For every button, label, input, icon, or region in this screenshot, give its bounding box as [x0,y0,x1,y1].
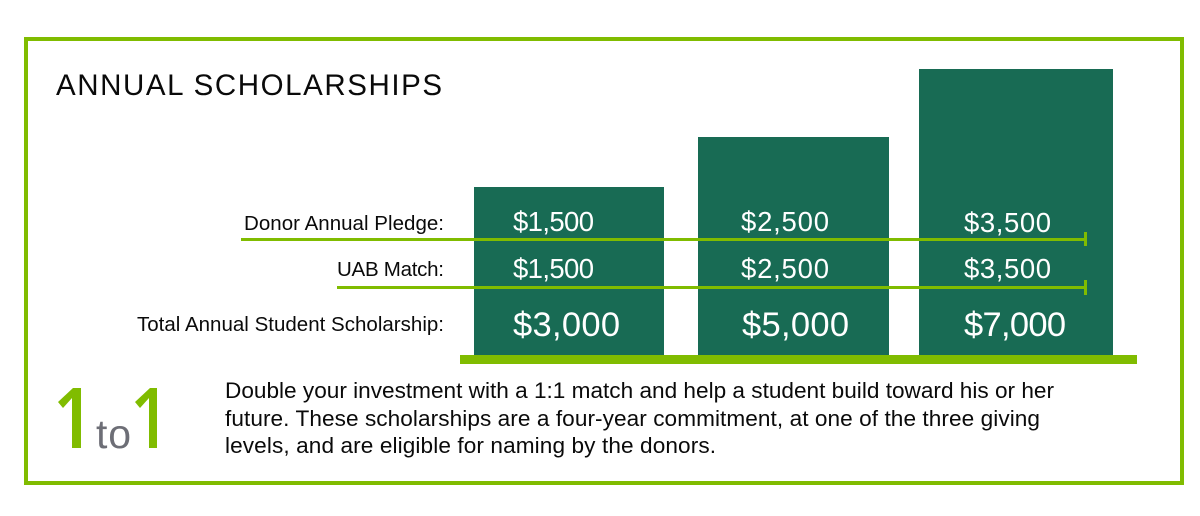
word: to: to [96,411,131,457]
row label: total annual student scholarship: Total Annual Student Scholarship: [137,313,444,336]
values: donor pledge: $1,500 [513,206,594,237]
line: donor pledge [241,232,1087,246]
ratio: 1 to 1 [58,388,157,457]
values: UAB match: $3,500 [964,253,1051,284]
values: donor pledge: $2,500 [741,206,829,237]
bar: level one [474,187,664,356]
title: ANNUAL SCHOLARSHIPS [56,69,442,102]
values: UAB match: $1,500 [513,253,594,284]
bar: level two [698,137,889,356]
numeral 1 right [135,388,157,448]
description: future. These scholarships are a four-year commitment, at one of the three giving [225,406,1040,431]
values: total: $7,000 [964,306,1066,344]
line: UAB match [337,280,1087,295]
bar: level three [919,69,1113,356]
bar chart [241,69,1137,364]
values: UAB match [513,253,1051,284]
description: levels, and are eligible for naming by the donors. [225,433,716,458]
values: donor pledge: $3,500 [964,207,1051,238]
numeral 1 left [58,388,81,448]
values: UAB match: $2,500 [741,253,829,284]
baseline [460,355,1137,364]
description: Double your investment with a 1:1 match and help a student build toward his or her [225,378,1054,403]
values: total [513,306,1066,344]
row label: donor annual pledge: Donor Annual Pledge: [244,212,444,235]
values: donor pledge [513,206,1051,238]
values: total: $5,000 [742,306,849,344]
values: total: $3,000 [513,306,620,344]
row label: UAB match: UAB Match: [337,258,444,281]
description [225,378,1054,458]
